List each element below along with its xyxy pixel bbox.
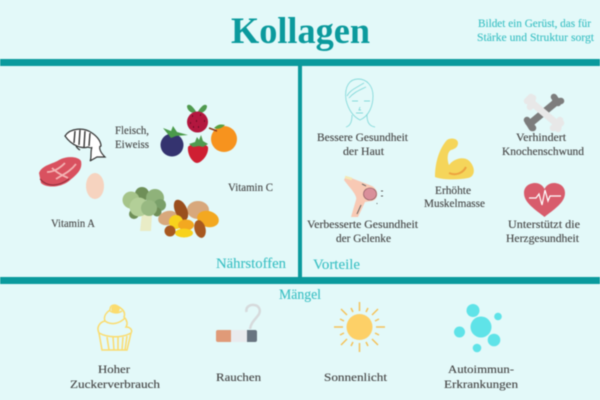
panel: Nährstoffen: [39, 105, 286, 272]
label: Verhindert Knochenschwund: [502, 130, 584, 158]
icon: cells: [454, 304, 502, 352]
icon: orange: [209, 124, 237, 152]
tagline: Bildet ein Gerüst, das für: [478, 16, 591, 30]
label: Fleisch, Eiweiss: Eiweiss: [115, 137, 149, 151]
label: Autoimmun-Erkrankungen: [444, 362, 518, 391]
icon: fish: [65, 129, 105, 161]
label: Erhöhte Muskelmasse: [424, 183, 485, 210]
label: Unterstützt die Herzgesundheit: Herzgesundheit: [506, 231, 580, 245]
heading: Mängel: Mängel: [279, 287, 321, 303]
label: Erhöhte Muskelmasse: Muskelmasse: [424, 196, 485, 210]
label: Autoimmun-Erkrankungen: Erkrankungen: [444, 377, 518, 391]
icon: blueberry: [160, 126, 188, 156]
label: Hoher Zuckerverbrauch: Zuckerverbrauch: [70, 377, 160, 391]
title: Kollagen: [231, 11, 370, 52]
icon: face: [346, 79, 375, 127]
label: Verhindert Knochenschwund: Knochenschwund: [502, 144, 584, 158]
label: Verbesserte Gesundheit der Gelenke: Verbesserte Gesundheit: [307, 217, 419, 231]
label: Fleisch, Eiweiss: Fleisch,: [115, 123, 149, 137]
tagline: Stärke und Struktur sorgt: [477, 30, 595, 44]
icon: nuts: [157, 197, 221, 239]
label: Hoher Zuckerverbrauch: [70, 362, 160, 391]
icon: strawberry: [188, 135, 208, 163]
label: Bessere Gesundheit der Haut: [317, 130, 409, 158]
icon: steak: [39, 157, 81, 187]
label: Sonnenlicht: Sonnenlicht: [324, 370, 388, 384]
label: Verbesserte Gesundheit der Gelenke: [307, 217, 419, 245]
icon: sun: [334, 302, 385, 352]
icon: knee joint: [344, 176, 383, 217]
label: Unterstützt die Herzgesundheit: [506, 217, 580, 245]
icon: raspberry: [187, 105, 208, 132]
icon: bones: [527, 97, 561, 129]
label: Vitamin C: Vitamin C: [228, 180, 273, 194]
label: Unterstützt die Herzgesundheit: Unterstützt die: [508, 217, 580, 231]
heading: Vorteile: Vorteile: [313, 257, 360, 273]
icon: egg: [86, 173, 104, 199]
label: Bessere Gesundheit der Haut: Bessere Gesundheit: [317, 130, 409, 144]
label: Verhindert Knochenschwund: Verhindert: [516, 130, 567, 144]
label: Hoher Zuckerverbrauch: Hoher: [98, 362, 130, 376]
icon: cigarette: [216, 305, 260, 342]
label: Fleisch, Eiweiss: [115, 123, 149, 151]
label: Rauchen: Rauchen: [216, 370, 261, 384]
icon: cupcake: [98, 305, 132, 350]
label: Verbesserte Gesundheit der Gelenke: der Gelenke: [336, 231, 391, 245]
panel: Vorteile: [307, 79, 584, 273]
panel: Mängel: [70, 287, 518, 391]
icon: heart: [524, 183, 565, 217]
icon: broccoli: [122, 187, 166, 231]
label: Autoimmun-Erkrankungen: Autoimmun-: [448, 362, 514, 376]
label: Vitamin A: Vitamin A: [51, 216, 95, 230]
heading: Nährstoffen: Nährstoffen: [216, 256, 286, 272]
label: Erhöhte Muskelmasse: Erhöhte: [435, 183, 471, 197]
label: Bessere Gesundheit der Haut: der Haut: [343, 144, 385, 158]
tagline: [477, 16, 595, 44]
icon: muscle arm: [435, 139, 474, 179]
